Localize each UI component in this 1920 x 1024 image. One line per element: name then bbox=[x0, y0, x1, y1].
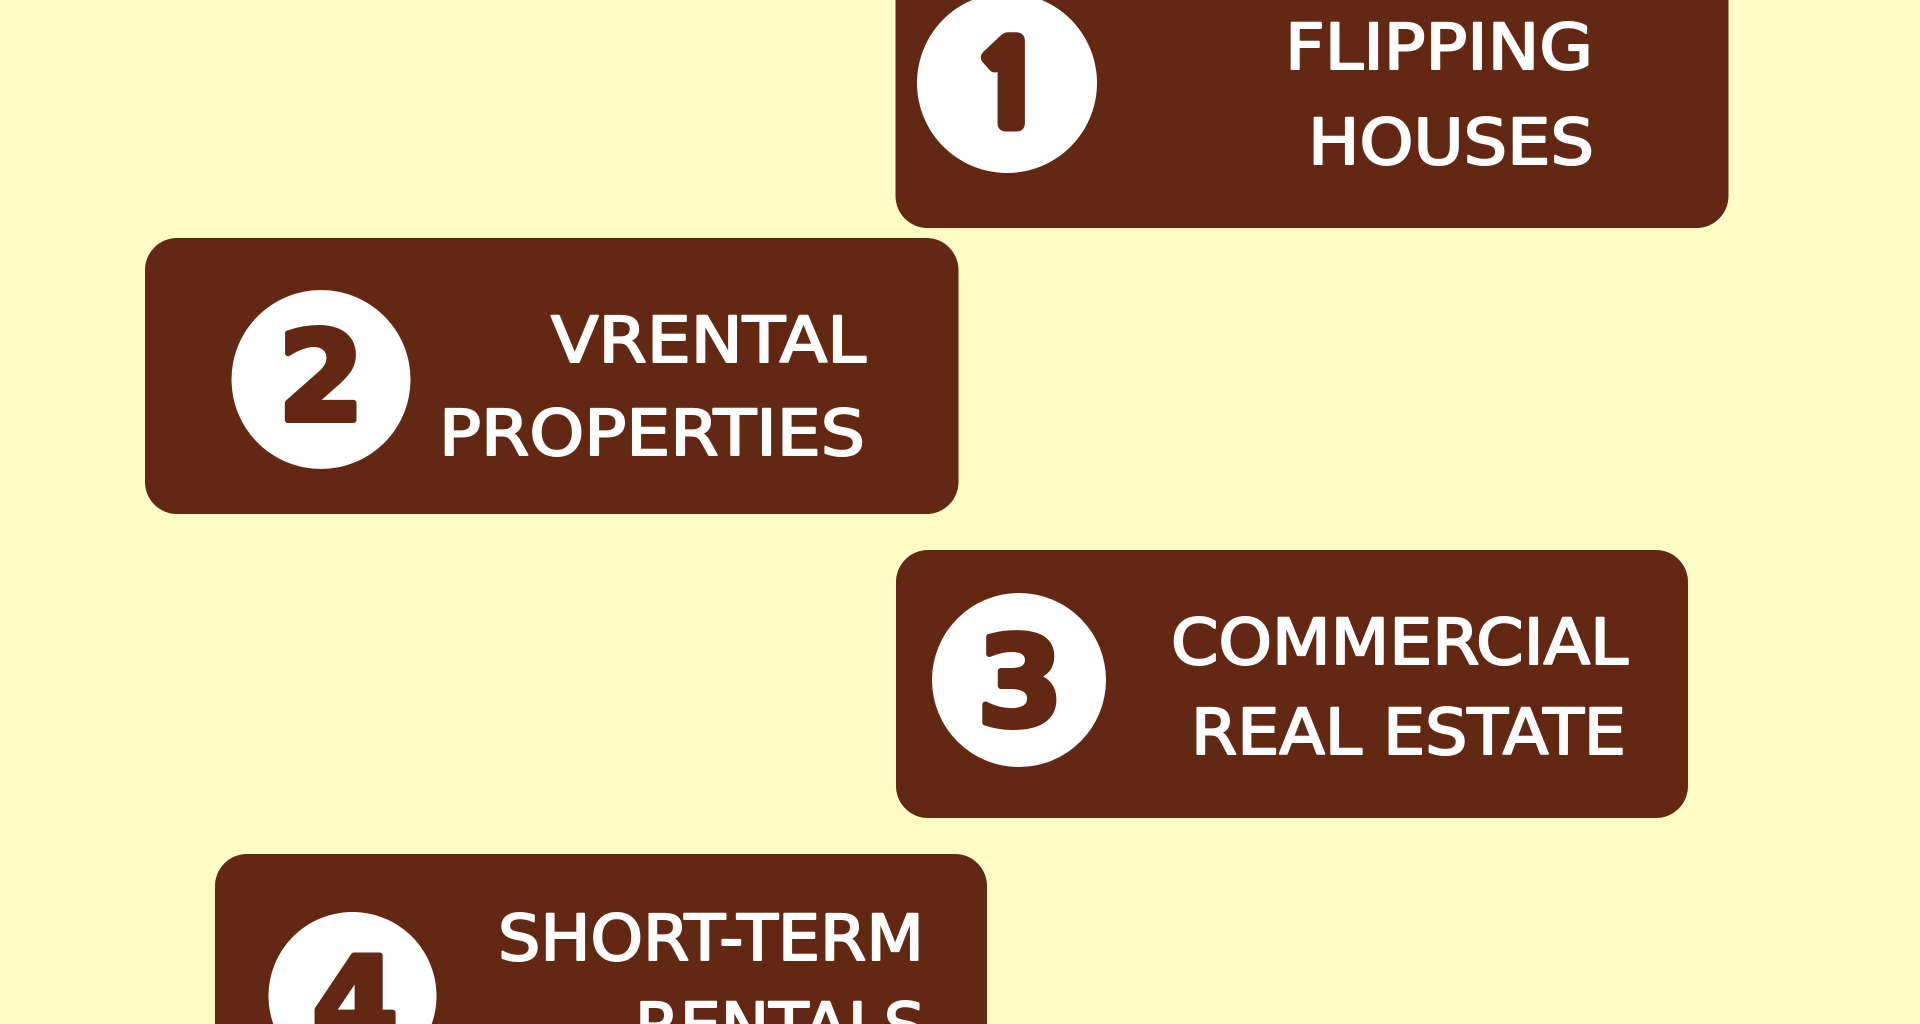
label: commercial real estate: REAL ESTATE bbox=[1191, 696, 1626, 769]
label: short-term rentals: SHORT-TERM bbox=[498, 902, 924, 975]
label: vrental properties: PROPERTIES bbox=[439, 397, 865, 470]
label: flipping houses: FLIPPING bbox=[1285, 11, 1593, 84]
icon: number 2 badge: 2 bbox=[278, 306, 364, 450]
panel: 4 short-term rentals bbox=[215, 854, 987, 1024]
panel: 3 commercial real estate bbox=[896, 550, 1688, 818]
label: flipping houses bbox=[1285, 11, 1594, 179]
panel: 1 flipping houses bbox=[896, 0, 1728, 228]
icon: number 4 badge bbox=[268, 912, 436, 1024]
icon: number 1 badge bbox=[917, 0, 1097, 173]
icon: number 1 badge: 1 bbox=[975, 30, 1043, 142]
icon: number 3 badge: 3 bbox=[977, 611, 1063, 755]
icon: number 2 badge bbox=[232, 290, 410, 469]
panel: 2 rental properties bbox=[145, 238, 958, 514]
label: short-term rentals bbox=[498, 902, 925, 1024]
label: vrental properties bbox=[439, 304, 866, 470]
label: flipping houses: HOUSES bbox=[1308, 106, 1594, 179]
icon: number 3 badge bbox=[932, 593, 1106, 767]
label: commercial real estate bbox=[1171, 606, 1628, 769]
label: vrental properties: VRENTAL bbox=[551, 304, 866, 377]
label: commercial real estate: COMMERCIAL bbox=[1171, 606, 1628, 679]
